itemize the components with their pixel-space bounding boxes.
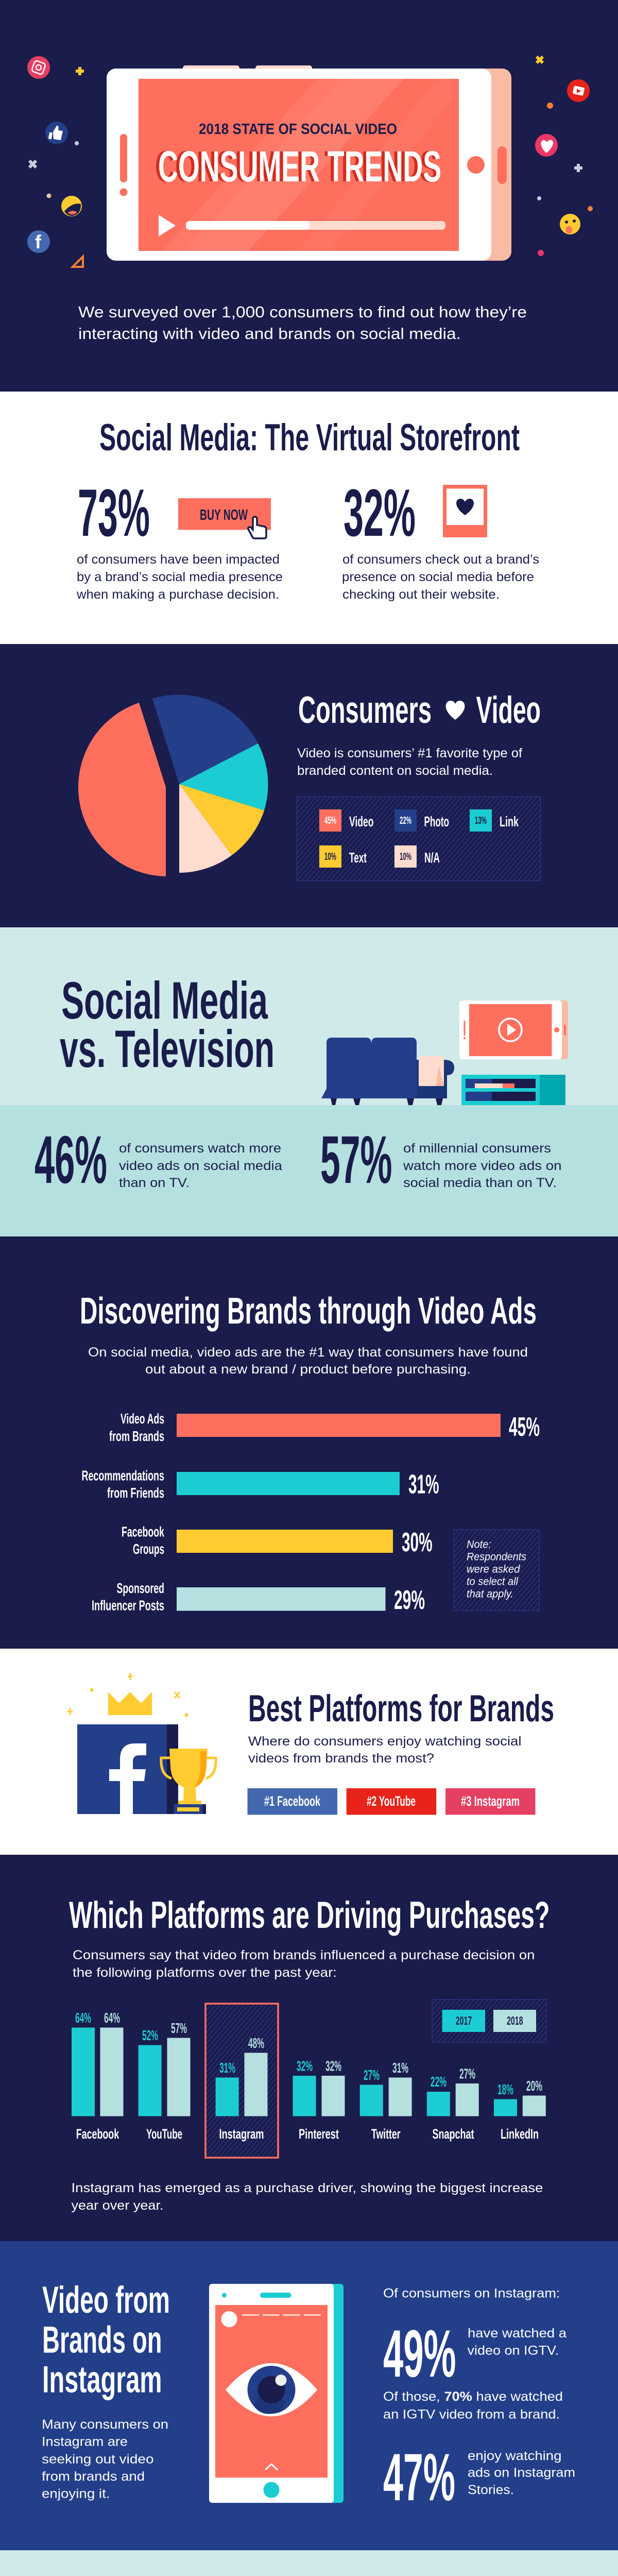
legend xyxy=(297,796,541,881)
bar chart: from Brands xyxy=(109,1428,164,1444)
heading xyxy=(42,2279,170,2401)
bar chart: 52% xyxy=(142,2027,158,2043)
heading: Social Media xyxy=(61,971,268,1030)
icon: phone with video player xyxy=(107,65,511,261)
stat 57%: 57% xyxy=(320,1122,392,1197)
panel: discovering brands xyxy=(0,1236,618,1649)
text: 57% description: of millennial consumers xyxy=(403,1141,551,1156)
illustration: couch watching tablet xyxy=(321,1001,568,1105)
text: 46% description: than on TV. xyxy=(119,1176,190,1190)
text block: Video is consumers’ #1 favorite type of xyxy=(297,746,522,760)
text: 46% description: video ads on social media xyxy=(119,1159,282,1173)
icon: buy now button xyxy=(178,498,271,538)
heading: Video from xyxy=(42,2279,170,2321)
legend: Text xyxy=(349,850,367,866)
text: 46% description: of consumers watch more xyxy=(119,1141,281,1156)
callout: note: Note: xyxy=(467,1538,491,1551)
bar chart: Video Ads xyxy=(121,1411,164,1427)
sparkles xyxy=(29,57,593,267)
callout: note xyxy=(454,1530,539,1611)
bar chart: Twitter xyxy=(371,2126,401,2142)
badge: #1 facebook xyxy=(247,1788,337,1815)
text block xyxy=(248,1734,521,1766)
text block xyxy=(88,1345,528,1377)
text: 70% description: Of those, 70% have watched xyxy=(383,2389,563,2404)
bar chart: YouTube xyxy=(146,2126,182,2142)
text: 49% description xyxy=(468,2326,566,2358)
legend: 13% xyxy=(475,815,487,826)
text block: branded content on social media. xyxy=(297,764,493,778)
text: 70% description: an IGTV video from a brand. xyxy=(383,2407,560,2421)
icon: heart xyxy=(535,134,558,157)
stat 32%: 32% xyxy=(344,475,416,550)
bar chart: Groups xyxy=(133,1541,164,1557)
legend: Photo xyxy=(424,814,449,829)
title xyxy=(155,142,441,191)
text: 57% description: social media than on TV. xyxy=(403,1176,557,1190)
bar chart: 64% xyxy=(75,2010,91,2026)
bar chart: Instagram xyxy=(219,2126,264,2142)
stat 46%: 46% xyxy=(35,1122,107,1197)
text block: seeking out video xyxy=(42,2452,153,2467)
icon: thumbs up xyxy=(45,122,68,144)
text: 73% description: of consumers have been impacted xyxy=(77,552,280,567)
heading: Brands on xyxy=(42,2319,162,2361)
legend: 2018 xyxy=(507,2014,523,2027)
heading: Instagram xyxy=(42,2359,162,2401)
bar chart: 48% xyxy=(248,2035,264,2051)
text block: Of consumers on Instagram: xyxy=(383,2286,560,2301)
text: 32% description xyxy=(342,552,539,602)
legend: 10% xyxy=(324,851,336,862)
highlight: instagram box xyxy=(205,2004,278,2158)
icon: facebook xyxy=(27,230,50,253)
bar chart: 20% xyxy=(526,2078,542,2094)
bar chart xyxy=(72,2010,546,2142)
text block xyxy=(73,1948,535,1980)
text block: Where do consumers enjoy watching social xyxy=(248,1734,521,1749)
bar chart: Facebook xyxy=(122,1524,164,1539)
bar chart: Sponsored xyxy=(116,1580,164,1596)
bar chart: 29% xyxy=(394,1585,425,1615)
legend: Video xyxy=(349,814,374,829)
badge: #2 youtube: #2 YouTube xyxy=(367,1793,416,1809)
panel: consumers love video xyxy=(0,644,618,927)
bar chart: 31% xyxy=(392,2060,408,2076)
panel: social media vs television xyxy=(0,927,618,1236)
subtitle: 2018 STATE OF SOCIAL VIDEO xyxy=(199,121,397,138)
icon: wow emoji xyxy=(560,214,580,234)
text: 47% description: ads on Instagram xyxy=(468,2466,575,2480)
stat 73%: 73% xyxy=(78,475,150,550)
text: 32% description: checking out their website. xyxy=(342,587,500,602)
text: 46% description xyxy=(119,1141,282,1190)
bar chart: 18% xyxy=(497,2081,513,2097)
text: 73% description xyxy=(76,552,283,602)
intro text xyxy=(78,303,527,343)
heading: vs. Television xyxy=(60,1020,274,1078)
badge: #3 instagram xyxy=(445,1788,536,1815)
legend xyxy=(432,1999,546,2042)
text: 73% description: by a brand’s social media presence xyxy=(77,570,283,584)
text: 49% description: video on IGTV. xyxy=(468,2343,559,2358)
text block xyxy=(42,2417,168,2501)
text block: videos from brands the most? xyxy=(248,1751,434,1766)
text: 32% description: of consumers check out a brand’s xyxy=(342,552,539,567)
text block: Consumers say that video from brands influenced a purchase decision on xyxy=(73,1948,535,1962)
bar chart: Snapchat xyxy=(433,2126,474,2142)
badge: #2 youtube xyxy=(347,1788,436,1815)
text block xyxy=(297,746,522,778)
intro text: We surveyed over 1,000 consumers to find out how they’re xyxy=(78,303,527,321)
illustration: facebook, crown and trophy xyxy=(67,1673,216,1814)
text block: the following platforms over the past year: xyxy=(73,1965,337,1980)
text: 47% description xyxy=(468,2449,575,2497)
icon: youtube xyxy=(567,79,590,102)
callout: note: Respondents xyxy=(467,1551,526,1563)
bar chart xyxy=(81,1411,540,1615)
text: 73% description: when making a purchase decision. xyxy=(76,587,279,602)
text block: Instagram are xyxy=(42,2435,128,2449)
icon: phone with eye xyxy=(209,2284,344,2503)
legend: 45% xyxy=(324,815,336,826)
legend: Link xyxy=(500,814,519,829)
text block xyxy=(71,2181,543,2213)
icon: instagram xyxy=(27,56,50,79)
stat 49%: 49% xyxy=(383,2316,456,2391)
bar chart: 27% xyxy=(459,2066,475,2081)
text: 47% description: Stories. xyxy=(468,2483,514,2497)
callout: note: that apply. xyxy=(467,1588,513,1600)
panel: what consumers watch xyxy=(0,2550,618,2576)
heading: Consumers xyxy=(298,689,432,731)
icon: laughing emoji xyxy=(61,196,82,216)
intro text: interacting with video and brands on social media. xyxy=(78,325,461,343)
panel: best platforms xyxy=(0,1649,618,1855)
text block: Instagram has emerged as a purchase driver, showing the biggest increase xyxy=(71,2181,543,2195)
bar chart: from Friends xyxy=(107,1485,164,1501)
bar chart: 45% xyxy=(509,1412,540,1442)
callout: note: were asked xyxy=(467,1563,521,1575)
text block: enjoying it. xyxy=(42,2486,110,2501)
icon: buy now button: BUY NOW xyxy=(200,507,248,523)
text: 47% description: enjoy watching xyxy=(468,2449,561,2463)
text: 57% description xyxy=(403,1141,561,1190)
bar chart: 64% xyxy=(104,2010,120,2026)
bar chart: 57% xyxy=(171,2020,187,2036)
bar chart: Influencer Posts xyxy=(92,1597,164,1614)
title: CONSUMER TRENDS xyxy=(155,142,438,191)
callout: note: to select all xyxy=(467,1575,519,1588)
text: 49% description: have watched a xyxy=(468,2326,566,2341)
pie chart xyxy=(78,694,268,876)
text: 70% description xyxy=(383,2389,563,2421)
badge: #3 instagram: #3 Instagram xyxy=(461,1793,520,1809)
text block: On social media, video ads are the #1 way that consumers have found xyxy=(88,1345,528,1360)
stat 47%: 47% xyxy=(383,2439,455,2515)
legend: 10% xyxy=(400,851,411,862)
bar chart: 27% xyxy=(364,2067,380,2083)
bar chart: 22% xyxy=(431,2074,447,2090)
icon: photo with heart xyxy=(443,485,487,537)
text block: year over year. xyxy=(71,2198,164,2213)
text: 57% description: watch more video ads on xyxy=(403,1159,561,1173)
panel: hero xyxy=(0,0,618,392)
legend: 22% xyxy=(400,815,411,826)
text block: Many consumers on xyxy=(42,2417,168,2432)
bar chart: 30% xyxy=(402,1528,433,1557)
legend: N/A xyxy=(424,850,440,866)
badge: #1 facebook: #1 Facebook xyxy=(264,1793,321,1809)
heading: Video xyxy=(476,689,541,731)
panel: video on instagram xyxy=(0,2241,618,2550)
icon: facebook: f xyxy=(35,231,42,252)
bar chart: 31% xyxy=(408,1469,439,1499)
bar chart: 31% xyxy=(219,2060,235,2076)
heading xyxy=(60,971,274,1078)
legend: 2017 xyxy=(456,2014,472,2027)
bar chart: Pinterest xyxy=(299,2126,339,2142)
bar chart: Recommendations xyxy=(81,1467,164,1484)
panel: platforms driving purchases xyxy=(0,1855,618,2241)
bar chart: LinkedIn xyxy=(501,2126,539,2142)
panel: virtual storefront xyxy=(0,392,618,644)
bar chart: Facebook xyxy=(76,2126,119,2142)
bar chart: 32% xyxy=(297,2058,313,2074)
text block: from brands and xyxy=(42,2469,145,2484)
text: 32% description: presence on social media before xyxy=(342,570,534,584)
title: CONSUMER TRENDS xyxy=(158,142,441,191)
bar chart: 32% xyxy=(325,2058,341,2074)
text block: out about a new brand / product before purchasing. xyxy=(145,1362,471,1377)
